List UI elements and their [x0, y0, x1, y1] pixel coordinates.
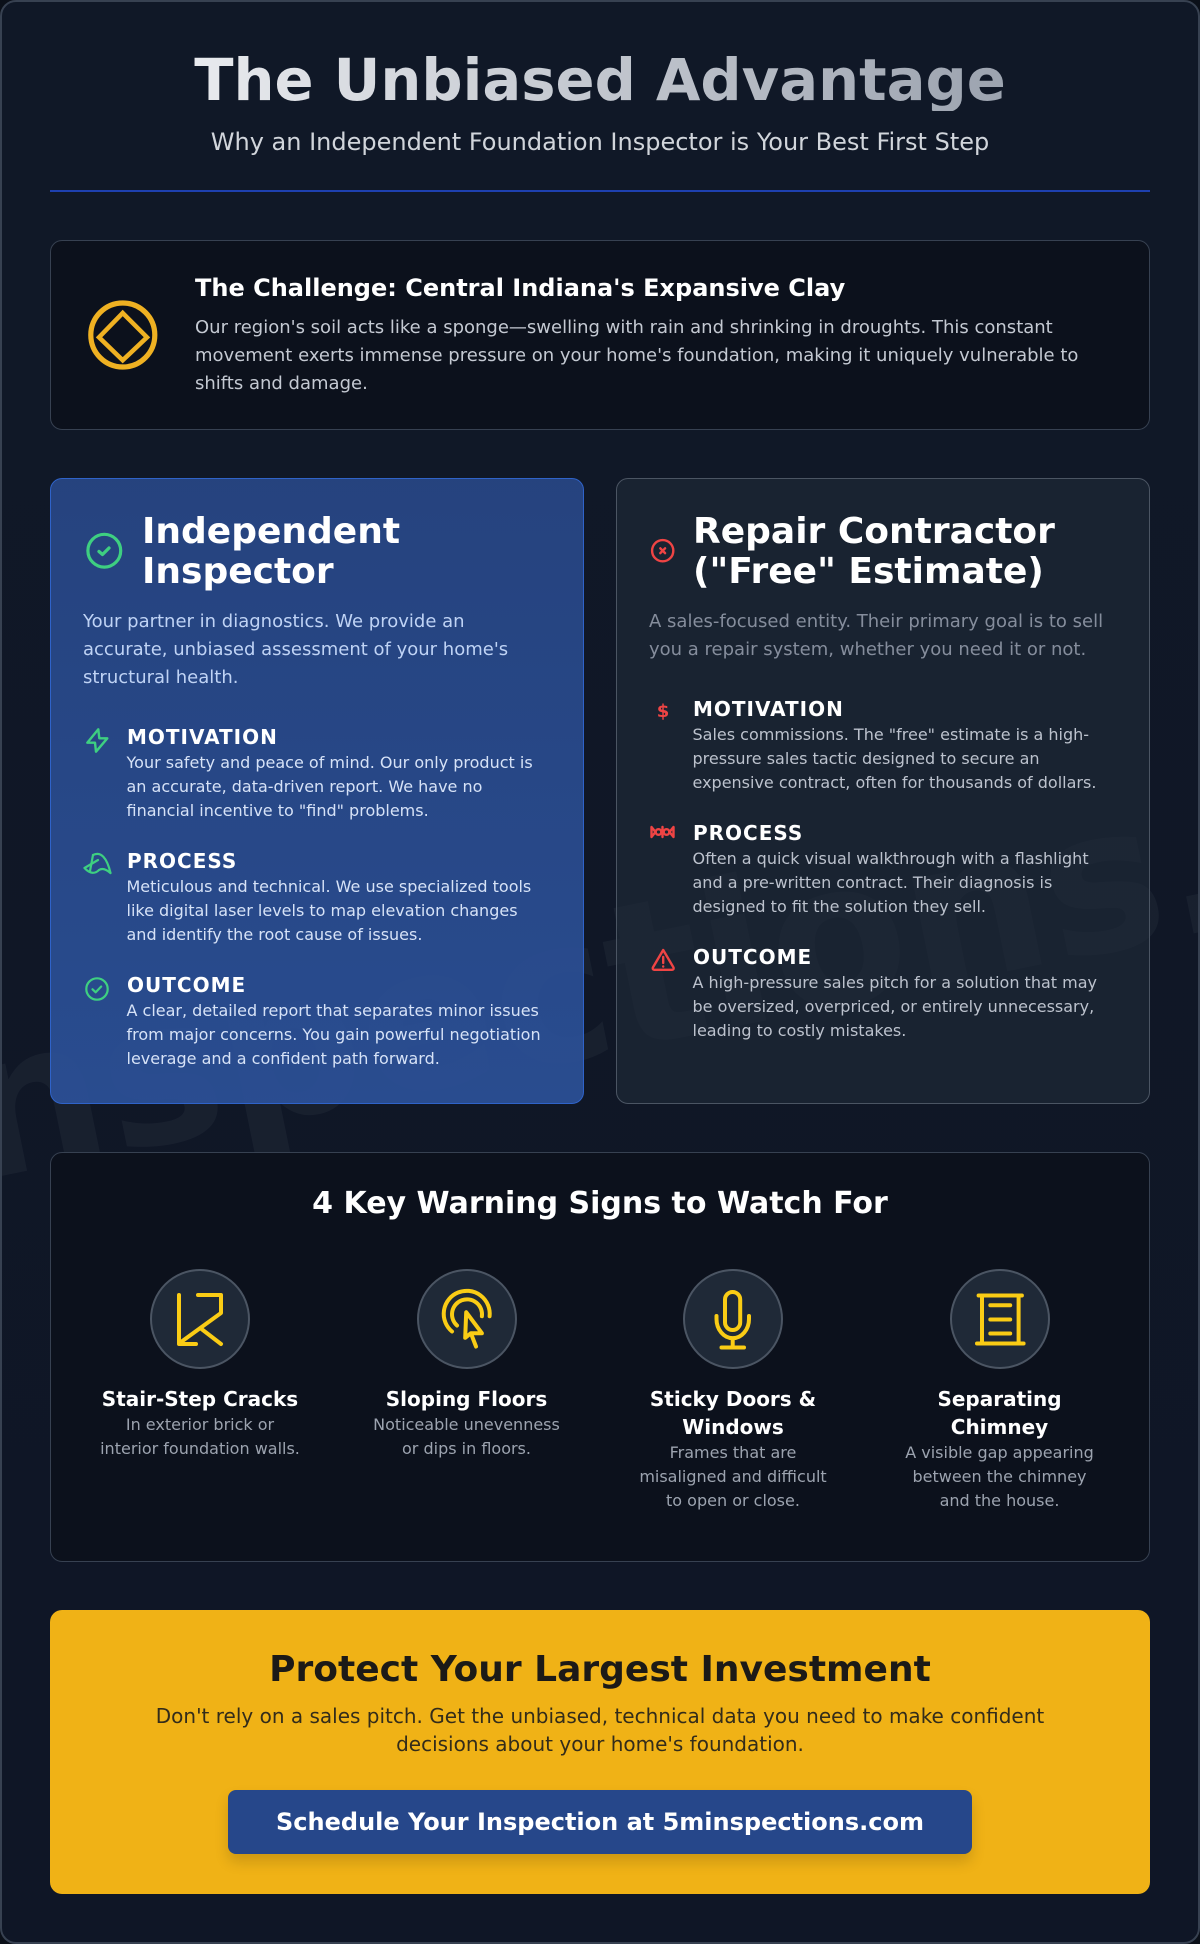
sloping floors title: Sloping Floors: [386, 1387, 547, 1411]
cta button: Schedule Your Inspection at 5minspections.com: [276, 1808, 924, 1836]
inspector intro: [83, 610, 508, 688]
outcome text: leading to costly mistakes.: [692, 1021, 906, 1040]
chimney description: [905, 1443, 1094, 1510]
subtitle: Why an Independent Foundation Inspector is Your Best First Step: [211, 128, 989, 156]
chimney description: A visible gap appearing: [905, 1443, 1094, 1462]
chimney description: between the chimney: [912, 1467, 1087, 1486]
challenge text: movement exerts immense pressure on your home's foundation, making it uniquely vulnerable to: [195, 345, 1078, 366]
item: process: [692, 821, 1089, 916]
cta button: [228, 1790, 972, 1854]
challenge text: shifts and damage.: [195, 373, 368, 394]
icon: lightning bolt: [86, 728, 108, 753]
item: outcome: [126, 973, 541, 1068]
process text: [126, 877, 531, 944]
sticky doors description: misaligned and difficult: [639, 1467, 827, 1486]
motivation text: financial incentive to "find" problems.: [126, 801, 429, 820]
process label: PROCESS: [693, 821, 803, 845]
stair-step description: interior foundation walls.: [100, 1439, 300, 1458]
motivation text: an accurate, data-driven report. We have no: [126, 777, 482, 796]
item: motivation: [126, 725, 533, 820]
item: process: [126, 849, 531, 944]
sign: stair-step cracks: [100, 1269, 300, 1458]
motivation text: [692, 725, 1096, 792]
cta text: Don't rely on a sales pitch. Get the unbiased, technical data you need to make confident: [156, 1704, 1044, 1728]
sign: separating chimney: [905, 1269, 1094, 1510]
contractor heading: Repair Contractor: [693, 511, 1055, 552]
stair-step description: [100, 1415, 300, 1458]
panel: repair contractor: [616, 478, 1150, 1104]
icon: repeating arrows: [650, 826, 675, 838]
process text: and identify the root cause of issues.: [126, 925, 422, 944]
outcome label: OUTCOME: [693, 945, 812, 969]
cta text: [156, 1704, 1044, 1756]
contractor heading: [693, 511, 1055, 592]
sloping floors description: [373, 1415, 560, 1458]
title: The Unbiased Advantage: [194, 47, 1006, 114]
inspector intro: structural health.: [83, 666, 238, 688]
chimney title: [937, 1387, 1062, 1439]
item: outcome: [692, 945, 1097, 1040]
outcome text: A high-pressure sales pitch for a solution that may: [692, 973, 1097, 992]
icon: green check circle: [86, 532, 122, 569]
sticky doors title: [650, 1387, 816, 1439]
icon: stair crack: [150, 1269, 250, 1369]
icon: dollar sign: $: [657, 701, 669, 722]
inspector heading: Inspector: [142, 551, 334, 592]
sticky doors title: Sticky Doors &: [650, 1387, 816, 1411]
sticky doors description: to open or close.: [666, 1491, 800, 1510]
motivation text: Sales commissions. The "free" estimate is a high-: [692, 725, 1089, 744]
warning signs heading: 4 Key Warning Signs to Watch For: [312, 1186, 888, 1221]
motivation text: [126, 753, 533, 820]
icon: diamond in circle: [88, 300, 158, 370]
challenge text: Our region's soil acts like a sponge—swelling with rain and shrinking in droughts. This constant: [195, 317, 1053, 338]
inspector heading: Independent: [142, 511, 400, 552]
panel: the challenge: [50, 240, 1150, 430]
panel: warning signs: [50, 1152, 1150, 1562]
process label: PROCESS: [127, 849, 237, 873]
title: [2, 51, 1198, 111]
header divider: [50, 190, 1150, 192]
chimney description: and the house.: [940, 1491, 1059, 1510]
outcome text: be oversized, overpriced, or entirely unnecessary,: [692, 997, 1094, 1016]
outcome text: A clear, detailed report that separates minor issues: [126, 1001, 539, 1020]
process text: like digital laser levels to map elevation changes: [126, 901, 518, 920]
stair-step description: In exterior brick or: [126, 1415, 274, 1434]
motivation text: Your safety and peace of mind. Our only product is: [126, 753, 533, 772]
process text: designed to fit the solution they sell.: [692, 897, 986, 916]
challenge heading: The Challenge: Central Indiana's Expansive Clay: [195, 274, 845, 302]
sticky doors title: Windows: [682, 1415, 784, 1439]
sloping floors description: Noticeable unevenness: [373, 1415, 560, 1434]
outcome label: OUTCOME: [127, 973, 246, 997]
panel: call to action: [50, 1610, 1150, 1894]
outcome text: from major concerns. You gain powerful negotiation: [126, 1025, 541, 1044]
outcome text: [692, 973, 1097, 1040]
inspector intro: Your partner in diagnostics. We provide an: [83, 610, 465, 632]
cta heading: Protect Your Largest Investment: [269, 1649, 931, 1690]
sign: sticky doors: [639, 1269, 827, 1510]
motivation text: pressure sales tactic designed to secure an: [692, 749, 1040, 768]
motivation text: expensive contract, often for thousands of dollars.: [692, 773, 1096, 792]
process text: [692, 849, 1089, 916]
inspector heading: [142, 511, 400, 592]
process text: Often a quick visual walkthrough with a flashlight: [692, 849, 1089, 868]
sticky doors description: [639, 1443, 827, 1510]
motivation label: MOTIVATION: [127, 725, 278, 749]
sticky doors description: Frames that are: [670, 1443, 796, 1462]
panel: independent inspector: [50, 478, 584, 1104]
chimney title: Separating: [937, 1387, 1062, 1411]
contractor heading: ("Free" Estimate): [693, 551, 1044, 592]
chimney title: Chimney: [951, 1415, 1048, 1439]
outcome text: [126, 1001, 541, 1068]
contractor intro: A sales-focused entity. Their primary goal is to sell: [649, 610, 1103, 632]
icon: cursor waves: [416, 1269, 516, 1369]
cta text: decisions about your home's foundation.: [396, 1732, 804, 1756]
icon: microphone: [683, 1269, 783, 1369]
inspector intro: accurate, unbiased assessment of your home's: [83, 638, 508, 660]
challenge text: [195, 317, 1078, 394]
item: motivation: [692, 697, 1096, 792]
stair-step title: Stair-Step Cracks: [102, 1387, 298, 1411]
motivation label: MOTIVATION: [693, 697, 844, 721]
icon: process fan: [83, 852, 112, 874]
icon: warning triangle: [652, 948, 675, 971]
sloping floors description: or dips in floors.: [402, 1439, 531, 1458]
icon: chimney: [950, 1269, 1050, 1369]
icon: red x circle: [650, 538, 674, 562]
contractor intro: you a repair system, whether you need it or not.: [649, 638, 1086, 660]
icon: outcome check: [85, 977, 109, 1001]
sign: sloping floors: [373, 1269, 560, 1458]
process text: and a pre-written contract. Their diagnosis is: [692, 873, 1052, 892]
contractor intro: [649, 610, 1103, 660]
outcome text: leverage and a confident path forward.: [126, 1049, 440, 1068]
process text: Meticulous and technical. We use specialized tools: [126, 877, 531, 896]
